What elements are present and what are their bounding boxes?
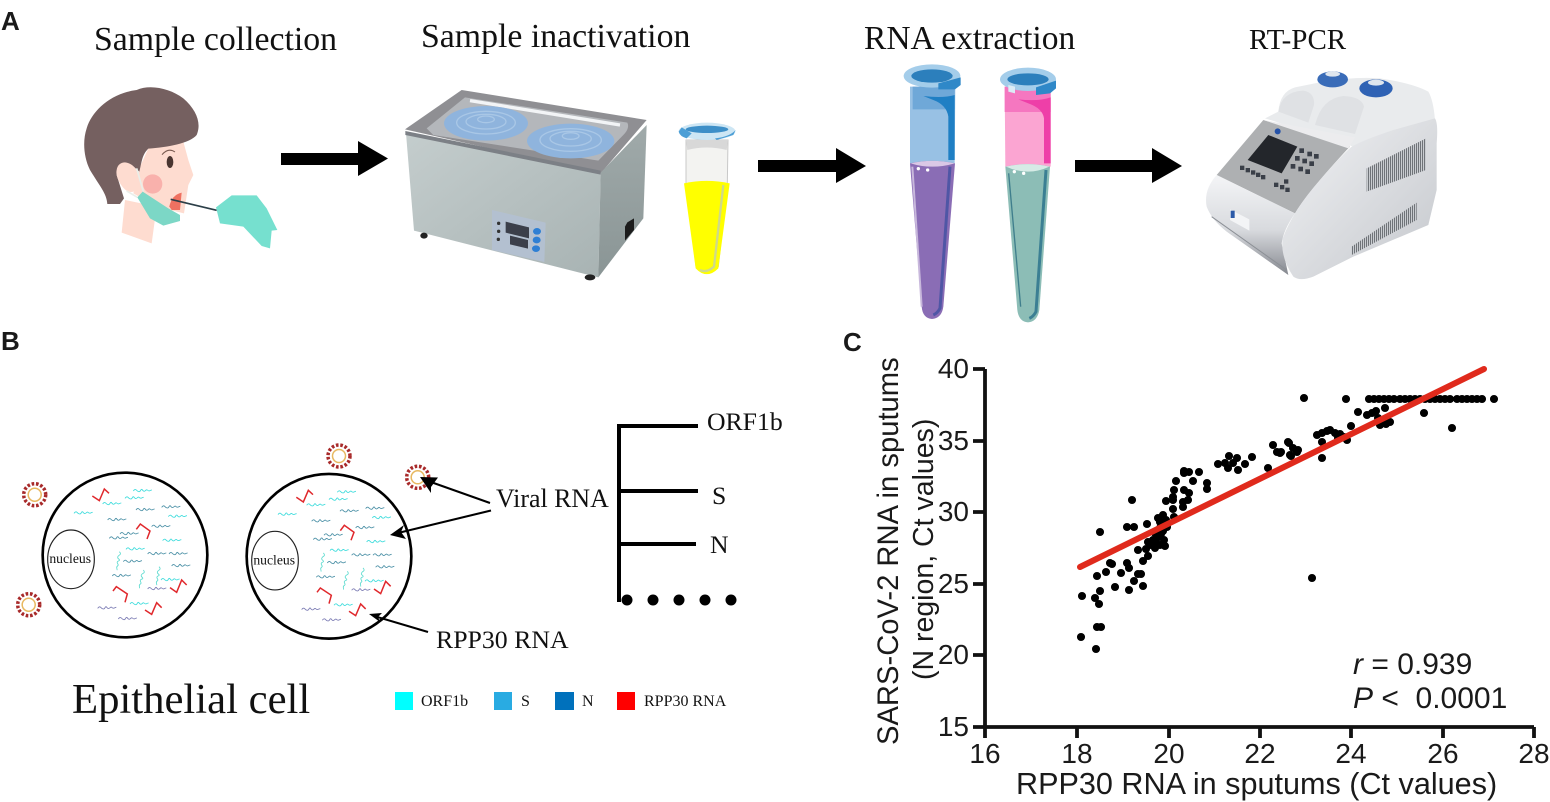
icon: pink and teal tube (1000, 68, 1056, 322)
axes (973, 369, 1534, 738)
x tick labels: 24 (1335, 738, 1367, 769)
arrow: extraction to RT-PCR (1075, 148, 1182, 183)
x tick labels: 18 (1061, 738, 1093, 769)
y tick labels: 30 (938, 496, 969, 527)
statistics annotation: P < 0.0001 (1353, 682, 1507, 715)
icons: virus particles (18, 445, 429, 616)
heading: Sample collection: Sample collection (94, 21, 337, 58)
heading: RT-PCR: RT-PCR (1249, 24, 1347, 56)
y tick labels: 20 (938, 639, 969, 670)
heading: Epithelial cell: Epithelial cell (72, 676, 310, 723)
genome diagram (617, 407, 783, 606)
panel label B: B (1, 326, 20, 356)
legend (395, 692, 727, 710)
label: Viral RNA: Viral RNA (496, 484, 609, 513)
heading: Sample inactivation: Sample inactivation (421, 18, 690, 55)
arrows: viral RNA pointers (390, 477, 491, 539)
arrow: inactivation to extraction (758, 148, 866, 183)
icon: purple tube (904, 64, 961, 319)
legend: ORF1b (421, 693, 468, 710)
legend: RPP30 RNA (644, 693, 727, 710)
x tick labels: 26 (1427, 738, 1459, 769)
y tick labels: 15 (938, 711, 969, 742)
y axis title (873, 357, 940, 745)
panel label A: A (1, 6, 20, 36)
y tick labels: 35 (938, 425, 969, 456)
icon: person with throat swab (84, 87, 277, 248)
panel label C: C (843, 327, 862, 357)
scatter plot (873, 353, 1550, 801)
data points (1077, 394, 1498, 653)
icon: yellow microtube (679, 123, 736, 274)
epithelial cell right: nucleus (253, 552, 295, 567)
legend: N (582, 693, 594, 710)
epithelial cell right (247, 474, 411, 639)
arrow: collection to inactivation (281, 141, 388, 176)
label: RPP30 RNA: RPP30 RNA (436, 625, 569, 654)
genome diagram: S (712, 481, 726, 510)
statistics annotation (1353, 648, 1507, 715)
epithelial cell left: nucleus (49, 551, 91, 566)
y axis title: (N region, Ct values) (908, 419, 940, 680)
x tick labels: 20 (1153, 738, 1185, 769)
legend: S (521, 693, 530, 710)
icon: RT-PCR thermal cycler (1206, 71, 1437, 279)
y tick labels: 40 (938, 353, 969, 384)
genome diagram: N (710, 530, 729, 559)
x tick labels: 28 (1518, 738, 1550, 769)
x axis title: RPP30 RNA in sputums (Ct values) (1016, 767, 1497, 801)
x tick labels: 22 (1244, 738, 1276, 769)
epithelial cell left (43, 473, 207, 637)
statistics annotation: r = 0.939 (1353, 648, 1472, 681)
y tick labels: 25 (938, 568, 969, 599)
x tick labels: 16 (969, 738, 1001, 769)
y tick labels (938, 353, 969, 742)
x tick labels (969, 738, 1550, 769)
y axis title: SARS-CoV-2 RNA in sputums (873, 357, 905, 745)
genome diagram: ORF1b (707, 407, 783, 436)
heading: RNA extraction: RNA extraction (864, 20, 1075, 57)
arrow: RPP30 RNA pointer (369, 613, 428, 632)
regression line (1080, 369, 1484, 567)
icon: water bath (405, 90, 647, 280)
